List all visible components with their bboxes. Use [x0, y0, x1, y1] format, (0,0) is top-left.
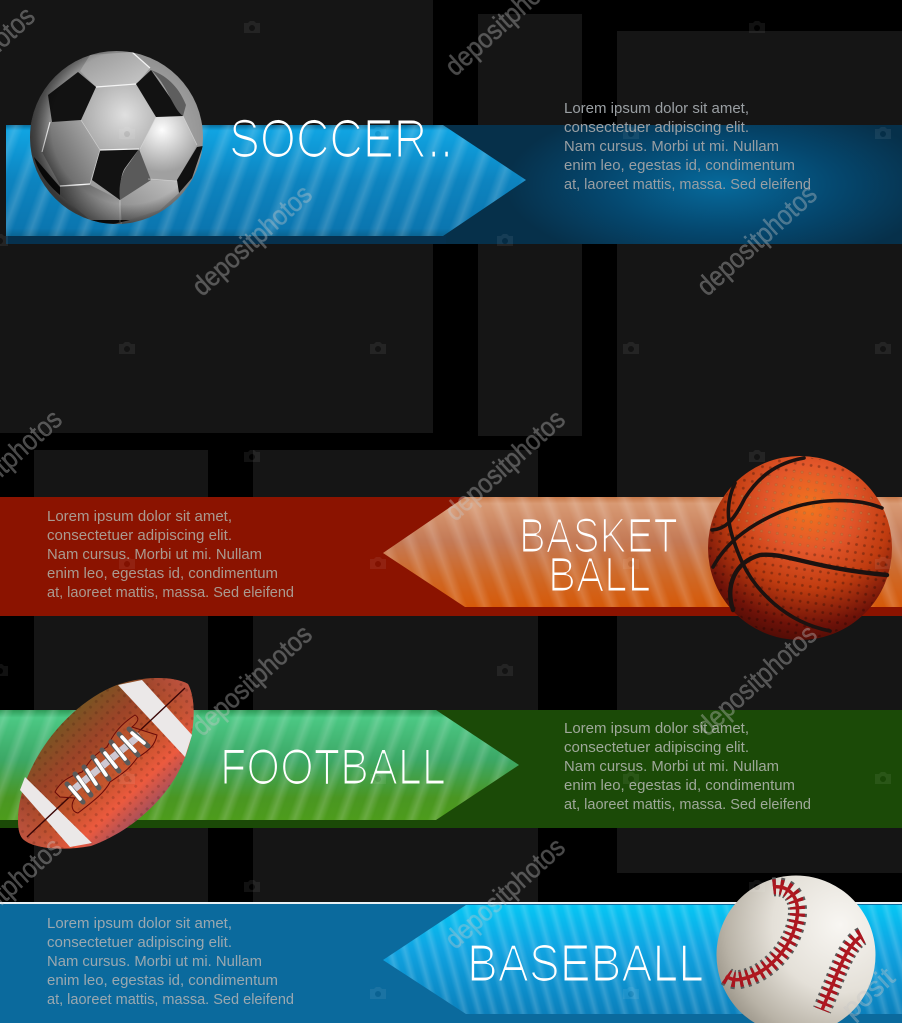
soccer band — [6, 125, 902, 244]
soccer arrow — [6, 125, 526, 236]
football arrow — [0, 710, 519, 820]
basketball description: enim leo, egestas id, condimentum — [47, 566, 278, 582]
soccer description: enim leo, egestas id, condimentum — [564, 158, 795, 174]
football description — [564, 721, 811, 813]
soccer description — [564, 101, 811, 193]
baseball description: Lorem ipsum dolor sit amet, — [47, 916, 232, 932]
baseball description: consectetuer adipiscing elit. — [47, 935, 232, 951]
soccer description: consectetuer adipiscing elit. — [564, 120, 749, 136]
banner: football — [0, 678, 902, 849]
banner: baseball — [0, 876, 902, 1023]
basketball arrow — [383, 497, 902, 607]
soccer description: at, laoreet mattis, massa. Sed eleifend — [564, 177, 811, 193]
icon: soccer ball — [30, 51, 203, 226]
football description: Lorem ipsum dolor sit amet, — [564, 721, 749, 737]
football description: at, laoreet mattis, massa. Sed eleifend — [564, 797, 811, 813]
basketball title: BALL — [548, 549, 651, 602]
watermark text: depositphotos — [186, 178, 318, 302]
basketball description: Nam cursus. Morbi ut mi. Nullam — [47, 547, 262, 563]
football band — [0, 710, 902, 828]
watermark text: depositphotos — [186, 618, 318, 742]
icon: basketball — [708, 456, 892, 640]
soccer description: Lorem ipsum dolor sit amet, — [564, 101, 749, 117]
soccer title: SOCCER.. — [229, 109, 453, 169]
basketball description: Lorem ipsum dolor sit amet, — [47, 509, 232, 525]
basketball band — [0, 497, 902, 616]
watermark text: depositphotos — [691, 618, 823, 742]
watermark text: depositphotos — [691, 178, 823, 302]
basketball description — [47, 509, 294, 601]
football description: consectetuer adipiscing elit. — [564, 740, 749, 756]
banner: basketball — [0, 456, 902, 640]
baseball description: at, laoreet mattis, massa. Sed eleifend — [47, 992, 294, 1008]
baseball title: BASEBALL — [467, 935, 704, 993]
banner: soccer — [6, 51, 902, 244]
baseball description — [47, 916, 294, 1008]
football description: enim leo, egestas id, condimentum — [564, 778, 795, 794]
baseball description: Nam cursus. Morbi ut mi. Nullam — [47, 954, 262, 970]
baseball band — [0, 904, 902, 1023]
basketball title: BASKET — [519, 510, 678, 563]
basketball title — [519, 510, 678, 602]
watermark text: depositphotos — [439, 831, 571, 955]
baseball arrow — [383, 905, 902, 1014]
football description: Nam cursus. Morbi ut mi. Nullam — [564, 759, 779, 775]
icon: baseball — [716, 876, 876, 1023]
soccer description: Nam cursus. Morbi ut mi. Nullam — [564, 139, 779, 155]
baseball description: enim leo, egestas id, condimentum — [47, 973, 278, 989]
watermark text: posit — [835, 961, 901, 1023]
icon: american football — [18, 678, 194, 849]
basketball description: at, laoreet mattis, massa. Sed eleifend — [47, 585, 294, 601]
white top rule — [0, 902, 902, 904]
basketball description: consectetuer adipiscing elit. — [47, 528, 232, 544]
watermark text: depositphotos — [439, 403, 571, 527]
football title: FOOTBALL — [220, 739, 446, 795]
